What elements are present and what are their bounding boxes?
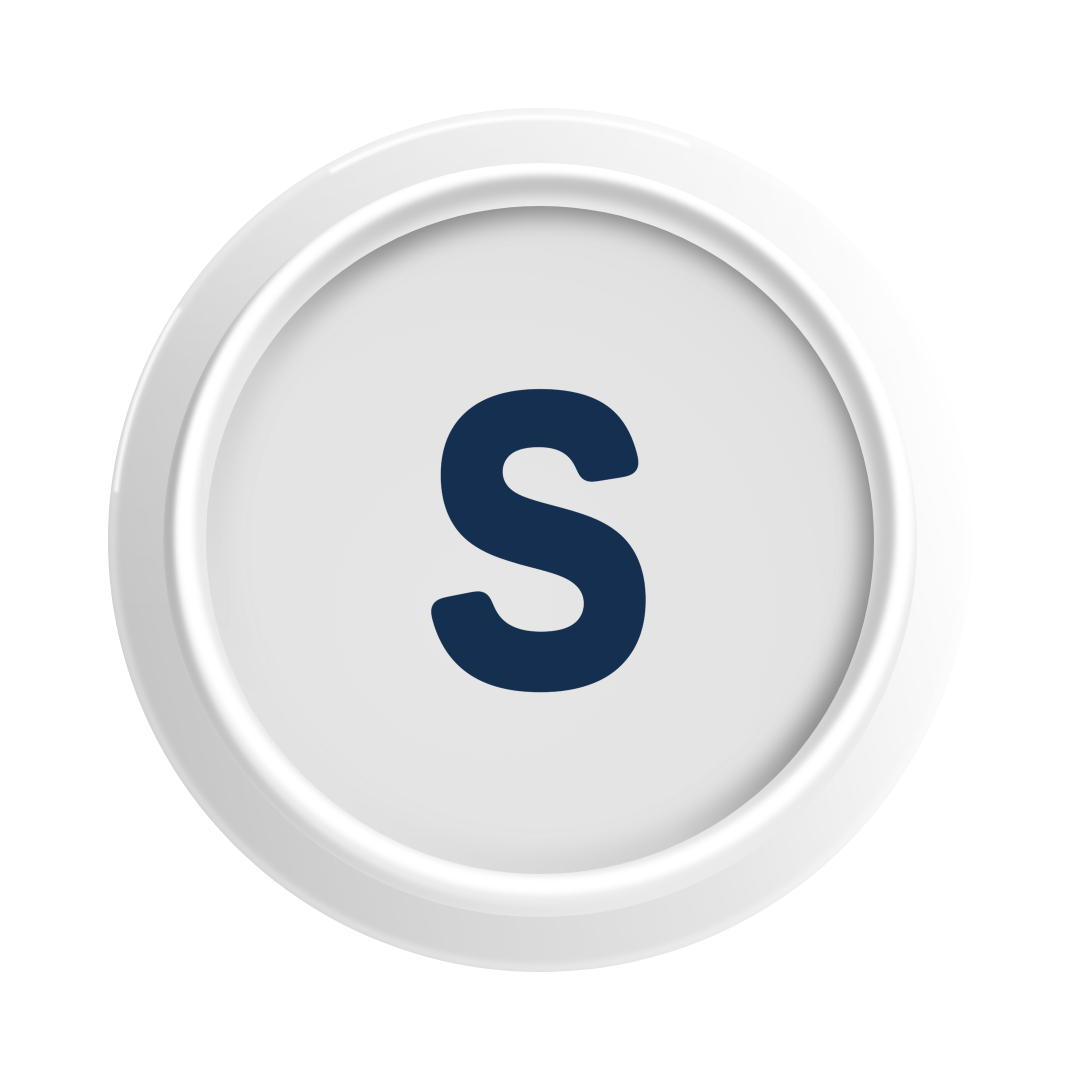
recessed dish [206,196,884,874]
illustration: glossy round button [108,108,918,972]
raised inner ring [163,163,917,917]
outer base ring [108,108,972,972]
letter S: S [427,314,652,766]
